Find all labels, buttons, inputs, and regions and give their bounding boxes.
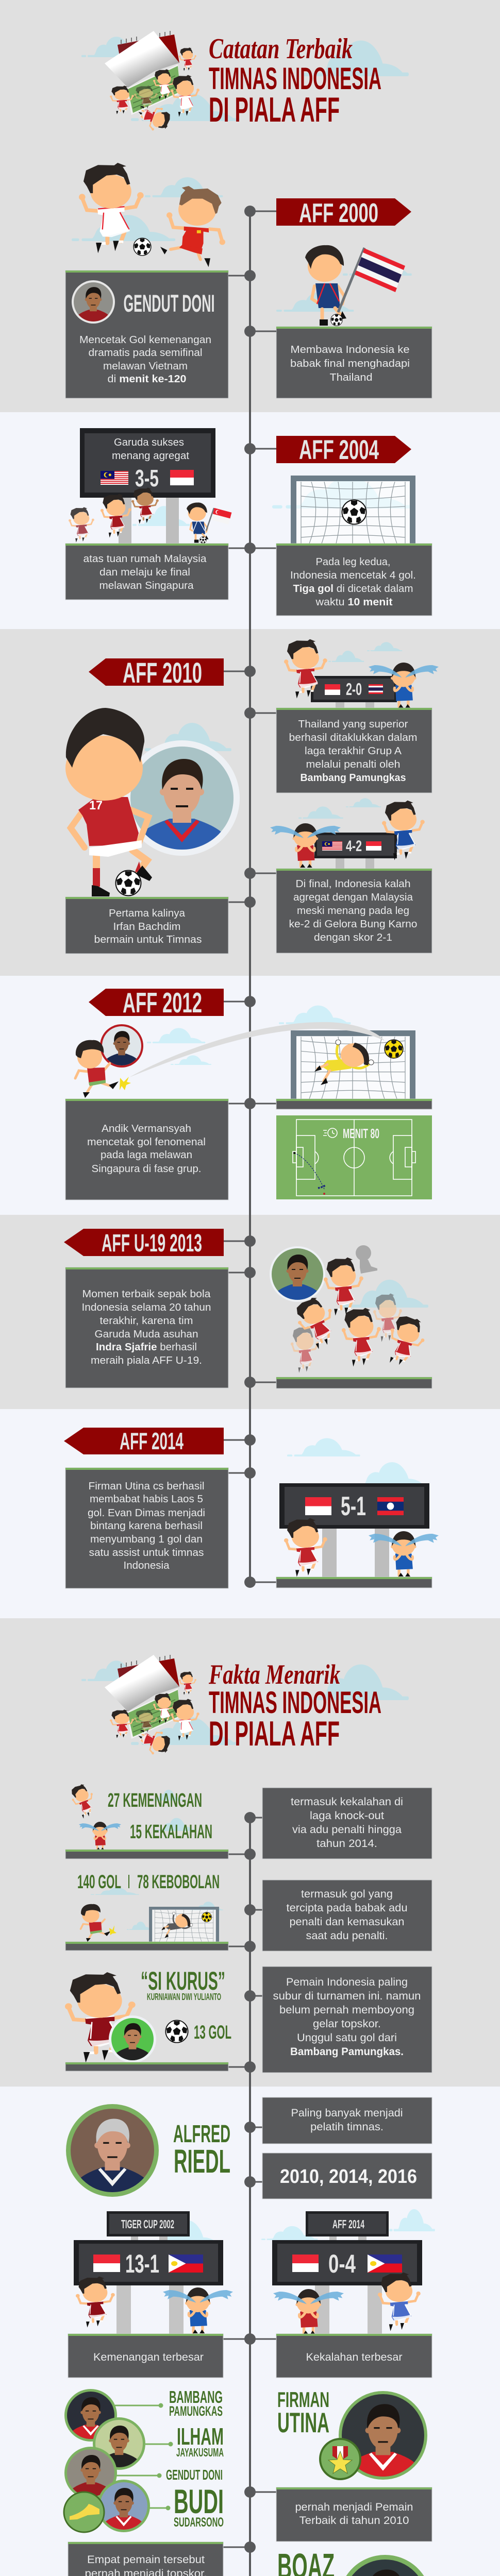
panel: Firman Utina cs: membabat habis Laos 5 [90,1494,203,1505]
panel: Gendut Doni [65,270,228,398]
panel: Firman Utina best player [276,2487,432,2541]
panel: Pertama kalinya: Pertama kalinya [109,908,186,919]
goal with ball [272,476,415,544]
panel: Kekalahan terbesar [276,2334,432,2378]
header illustration 2: calendar and players [81,1655,409,1759]
panel: 2010, 2014, 2016 [262,2153,432,2199]
stat: Si Kurus Kurniawan: KURNIAWAN DWI YULIANTO [147,1992,221,2002]
four top scorers: BUDI [174,2482,224,2520]
photo: Firman Utina [339,2391,427,2480]
panel: Pertama kalinya [65,897,228,954]
Alfred Riedl [66,2104,230,2197]
panel: Kemenangan terbesar: Kemenangan terbesar [93,2351,204,2363]
panel: termasuk kekalahan: laga knock-out [310,1810,384,1822]
Firman Utina: UTINA [277,2406,329,2438]
pitch diagram: menit 80: MENIT 80 [343,1126,379,1141]
panel: Empat pemain: Empat pemain tersebut [87,2554,205,2566]
panel: Andik Vermansyah: Andik Vermansyah [102,1123,191,1134]
scoreboard: Malaysia vs Indonesia 3-5: 3-5 [135,465,159,492]
stat: 140 gol and 78 kebobolan: 78 KEBOBOLAN [137,1871,220,1892]
stat: 27 kemenangan and 15 kekalahan: 15 KEKALAHAN [130,1821,212,1843]
four top scorers: GENDUT DONI [166,2467,223,2483]
panel: termasuk kekalahan [262,1788,432,1859]
panel: thin base [276,1099,432,1109]
panel: Pada leg kedua: Tiga gol di dicetak dalam [293,583,413,595]
panel: Pada leg kedua: Pada leg kedua, [315,556,391,568]
panel: Pemain Indonesia paling subur: Unggul satu gol dari [297,2032,397,2044]
four top scorers: PAMUNGKAS [169,2403,223,2419]
photo: Indra Sjafrie [270,1246,325,1302]
photo: Ilham Jayakusuma [93,2417,145,2470]
panel: Andik Vermansyah: mencetak gol fenomenal [87,1137,206,1148]
trophy [356,1245,377,1274]
panel: termasuk gol: tercipta pada babak adu [287,1902,407,1914]
panel: Thailand yang superior: berhasil ditaklukkan dalam [289,732,418,743]
title: Fakta Menarik [208,1659,381,1753]
panel: Paling banyak menjadi pelatih [262,2097,432,2144]
title: Catatan Terbaik [209,33,353,65]
panel: thin base [65,1850,228,1859]
panel: Membawa Indonesia: Thailand [330,372,372,383]
panel: Firman Utina cs: gol. Evan Dimas menjadi [88,1507,205,1519]
panel: Membawa Indonesia: babak final menghadapi [290,358,410,369]
panel: Andik Vermansyah: Singapura di fase grup. [92,1163,201,1175]
arrow: AFF U-19 2013: AFF U-19 2013 [102,1230,202,1257]
stat: 140 gol and 78 kebobolan: 140 GOL [77,1871,121,1892]
scoreboard: Tiger Cup 2002 13-1: 13-1 [125,2249,159,2278]
panel: Andik Vermansyah [65,1099,228,1200]
panel: Di final [276,869,432,953]
timeline spine 2 [249,1818,251,2576]
panel: Membawa Indonesia [276,327,432,398]
stat: 140 gol and 78 kebobolan [77,1871,223,1942]
panel: Paling banyak menjadi pelatih: Paling banyak menjadi [291,2107,403,2119]
timeline spine 1 [249,211,251,1582]
panel: atas tuan rumah Malaysia: atas tuan rumah Malaysia [84,553,207,565]
scoreboard: Malaysia vs Indonesia 3-5: menang agregat [112,450,189,462]
panel: Gendut Doni: dramatis pada semifinal [89,347,202,359]
title: Fakta Menarik: Fakta Menarik [208,1659,340,1690]
arrow: AFF 2012: AFF 2012 [123,987,202,1019]
Irfan Bachdim illustration [65,708,240,896]
panel: Firman Utina cs: Firman Utina cs berhasil [89,1481,204,1492]
arrow: AFF 2014 [64,1428,224,1454]
photo: Andik Vermansyah [100,1024,143,1067]
scoreboard: Indonesia vs Laos 5-1 [279,1438,439,1577]
photo: Bambang Pamungkas [64,2389,117,2442]
panel: thin base [65,2062,228,2071]
arrow: AFF 2012 [89,987,224,1019]
panel: Kekalahan terbesar: Kekalahan terbesar [306,2351,403,2363]
timeline connectors and dots [224,206,276,1588]
stat: Si Kurus Kurniawan: 13 GOL [194,2022,231,2043]
panel: atas tuan rumah Malaysia: dan melaju ke final [99,567,190,578]
panel: Thailand yang superior: melalui penalti oleh [306,759,400,770]
panel: Momen terbaik: Garuda Muda asuhan [95,1329,198,1340]
scoreboard: Tiger Cup 2002 13-1: TIGER CUP 2002 [121,2217,174,2231]
timeline connectors and dots 2 [223,1812,276,2576]
panel: Firman Utina cs [65,1468,228,1588]
panel: Di final: meski menang pada leg [297,905,409,917]
four top scorers [64,2387,224,2532]
panel: Thailand yang superior [276,708,432,793]
photo: Kurniawan [109,2015,156,2063]
photo: Alfred Riedl [66,2104,159,2197]
stat: 27 kemenangan and 15 kekalahan [69,1782,212,1850]
Firman Utina: FIRMAN [277,2387,329,2412]
panel: Di final: Di final, Indonesia kalah [296,878,410,890]
scoreboard: AFF 2014 0-4: AFF 2014 [332,2217,364,2231]
arrow: AFF 2014: AFF 2014 [120,1428,184,1454]
four top scorers: SUDARSONO [174,2515,224,2530]
panel: Pemain Indonesia paling subur: Pemain Indonesia paling [286,1976,408,1988]
panel: Momen terbaik: Indonesia selama 20 tahun [81,1302,211,1313]
photo: Gendut Doni [64,2447,117,2499]
panel: atas tuan rumah Malaysia: melawan Singapura [99,580,194,591]
player number 17 [65,708,152,896]
panel: termasuk kekalahan: termasuk kekalahan di [291,1796,403,1808]
stat: 27 kemenangan and 15 kekalahan: 27 KEMENANGAN [108,1790,202,1811]
scoreboard: AFF 2014 0-4 [261,2209,435,2334]
panel: Gendut Doni: GENDUT DONI [124,290,214,317]
panel: Momen terbaik: Indra Sjafrie berhasil [96,1342,197,1353]
panel: thin base [276,1377,432,1388]
panel: Andik Vermansyah: pada laga melawan [101,1149,192,1161]
arrow: AFF 2000: AFF 2000 [299,198,378,228]
four top scorers: JAYAKUSUMA [176,2446,224,2459]
pitch diagram: menit 80 [276,1115,432,1199]
photo: Budi Sudarsono [97,2480,150,2532]
panel: Firman Utina cs: Indonesia [124,1560,170,1571]
panel: Pemain Indonesia paling subur: belum pernah memboyong [279,2004,414,2016]
panel: Momen terbaik [65,1267,228,1388]
scoreboard: Malaysia vs Indonesia 4-2: 4-2 [346,838,362,855]
panel: Firman Utina cs: satu assist untuk timnas [89,1547,204,1558]
scoreboard: Indonesia vs Thailand 2-0 [284,639,439,708]
stat: Si Kurus Kurniawan: “SI KURUS” [141,1967,225,1995]
panel: thin base [276,1577,432,1588]
scoreboard: Malaysia vs Indonesia 3-5: Garuda sukses [114,437,184,448]
panel: 2010, 2014, 2016: 2010, 2014, 2016 [280,2166,417,2188]
panel: Firman Utina cs: bintang karena berhasil [90,1520,203,1532]
player number 17: 17 [89,799,103,812]
panel: Thailand yang superior: laga terakhir Grup A [305,745,402,757]
panel: Paling banyak menjadi pelatih: pelatih timnas. [310,2121,384,2133]
panel: termasuk gol: saat adu penalti. [306,1930,388,1942]
panel: Pada leg kedua: waktu 10 menit [315,597,393,608]
panel: termasuk kekalahan: tahun 2014. [316,1838,377,1850]
scoreboard: Malaysia vs Indonesia 3-5 [69,428,232,544]
panel: Pada leg kedua: Indonesia mencetak 4 gol. [290,570,416,581]
scoreboard: Indonesia vs Laos 5-1: 5-1 [341,1492,366,1521]
title [209,33,381,129]
four top scorers: BAMBANG [169,2387,223,2406]
panel: Gendut Doni: Mencetak Gol kemenangan [79,334,211,346]
stat: Si Kurus Kurniawan [65,1967,231,2063]
scoreboard: AFF 2014 0-4: 0-4 [328,2249,356,2278]
panel: Thailand yang superior: Thailand yang superior [298,719,408,730]
panel: thin base [65,1942,228,1951]
header illustration: calendar and players [81,31,409,135]
Alfred Riedl: RIEDL [174,2143,230,2180]
panel: Membawa Indonesia: Membawa Indonesia ke [291,344,409,355]
panel: Pada leg kedua [276,544,432,616]
panel: Empat pemain [68,2542,223,2576]
panel: Pertama kalinya: bermain untuk Timnas [94,934,202,945]
arrow: AFF 2004: AFF 2004 [299,435,379,465]
panel: Momen terbaik: meraih piala AFF U-19. [91,1355,202,1366]
four top scorers: ILHAM [177,2423,224,2450]
icon: golden boot [64,2492,104,2532]
title: DI PIALA AFF [209,90,340,129]
panel: Thailand yang superior: Bambang Pamungkas [300,772,406,784]
panel: Di final: agregat dengan Malaysia [293,892,413,903]
scoreboard: Malaysia vs Indonesia 4-2 [270,798,425,869]
title: Fakta Menarik: DI PIALA AFF [209,1714,340,1753]
scoreboard: Indonesia vs Thailand 2-0: 2-0 [346,680,362,699]
arrow: AFF 2010: AFF 2010 [123,656,202,689]
title: TIMNAS INDONESIA [209,61,381,96]
Boaz Solossa [277,2546,431,2576]
panel: Gendut Doni: di menit ke-120 [107,374,187,385]
panel: termasuk gol: termasuk gol yang [301,1888,393,1900]
panel: Momen terbaik: Momen terbaik sepak bola [82,1289,211,1300]
panel: Gendut Doni: melawan Vietnam [103,361,188,372]
scoreboard: Tiger Cup 2002 13-1 [74,2211,233,2334]
panel: termasuk gol [262,1880,432,1951]
panel: Firman Utina cs: menyumbang 1 gol dan [90,1534,203,1545]
panel: Firman Utina best player: pernah menjadi Pemain [295,2501,413,2513]
photo: Gendut Doni [72,280,115,324]
panel: Pertama kalinya: Irfan Bachdim [113,921,180,933]
Alfred Riedl: ALFRED [173,2121,230,2148]
photo: Irfan Bachdim [124,740,240,856]
panel: Momen terbaik: terakhir, karena tim [100,1315,193,1327]
arrow: AFF U-19 2013 [64,1229,224,1257]
panel: Kemenangan terbesar [68,2334,223,2378]
free-kick illustration [75,1006,415,1099]
panel: Pemain Indonesia paling subur [262,1967,432,2073]
team celebration with trophy [270,1245,430,1373]
panel: Firman Utina best player: Terbaik di tahun 2010 [299,2515,409,2527]
panel: atas tuan rumah Malaysia [65,544,228,600]
panel: Di final: ke-2 di Gelora Bung Karno [289,919,418,930]
panel: termasuk gol: penalti dan kemasukan [290,1916,404,1928]
Firman Utina [277,2387,427,2480]
arrow: AFF 2010 [89,656,224,689]
panel: Pemain Indonesia paling subur: Bambang Pamungkas. [290,2046,404,2058]
panel: termasuk kekalahan: via adu penalti hingga [292,1824,402,1836]
AFF 2000 illustration [72,163,412,326]
panel: Pemain Indonesia paling subur: subur di turnamen ini. namun [273,1990,421,2002]
panel: Pemain Indonesia paling subur: gelar topskor. [313,2018,381,2030]
panel: Di final: dengan skor 2-1 [314,932,392,943]
photo: Boaz Solossa [339,2555,431,2576]
title: Fakta Menarik: TIMNAS INDONESIA [209,1685,381,1720]
icon: medal star [320,2439,360,2479]
